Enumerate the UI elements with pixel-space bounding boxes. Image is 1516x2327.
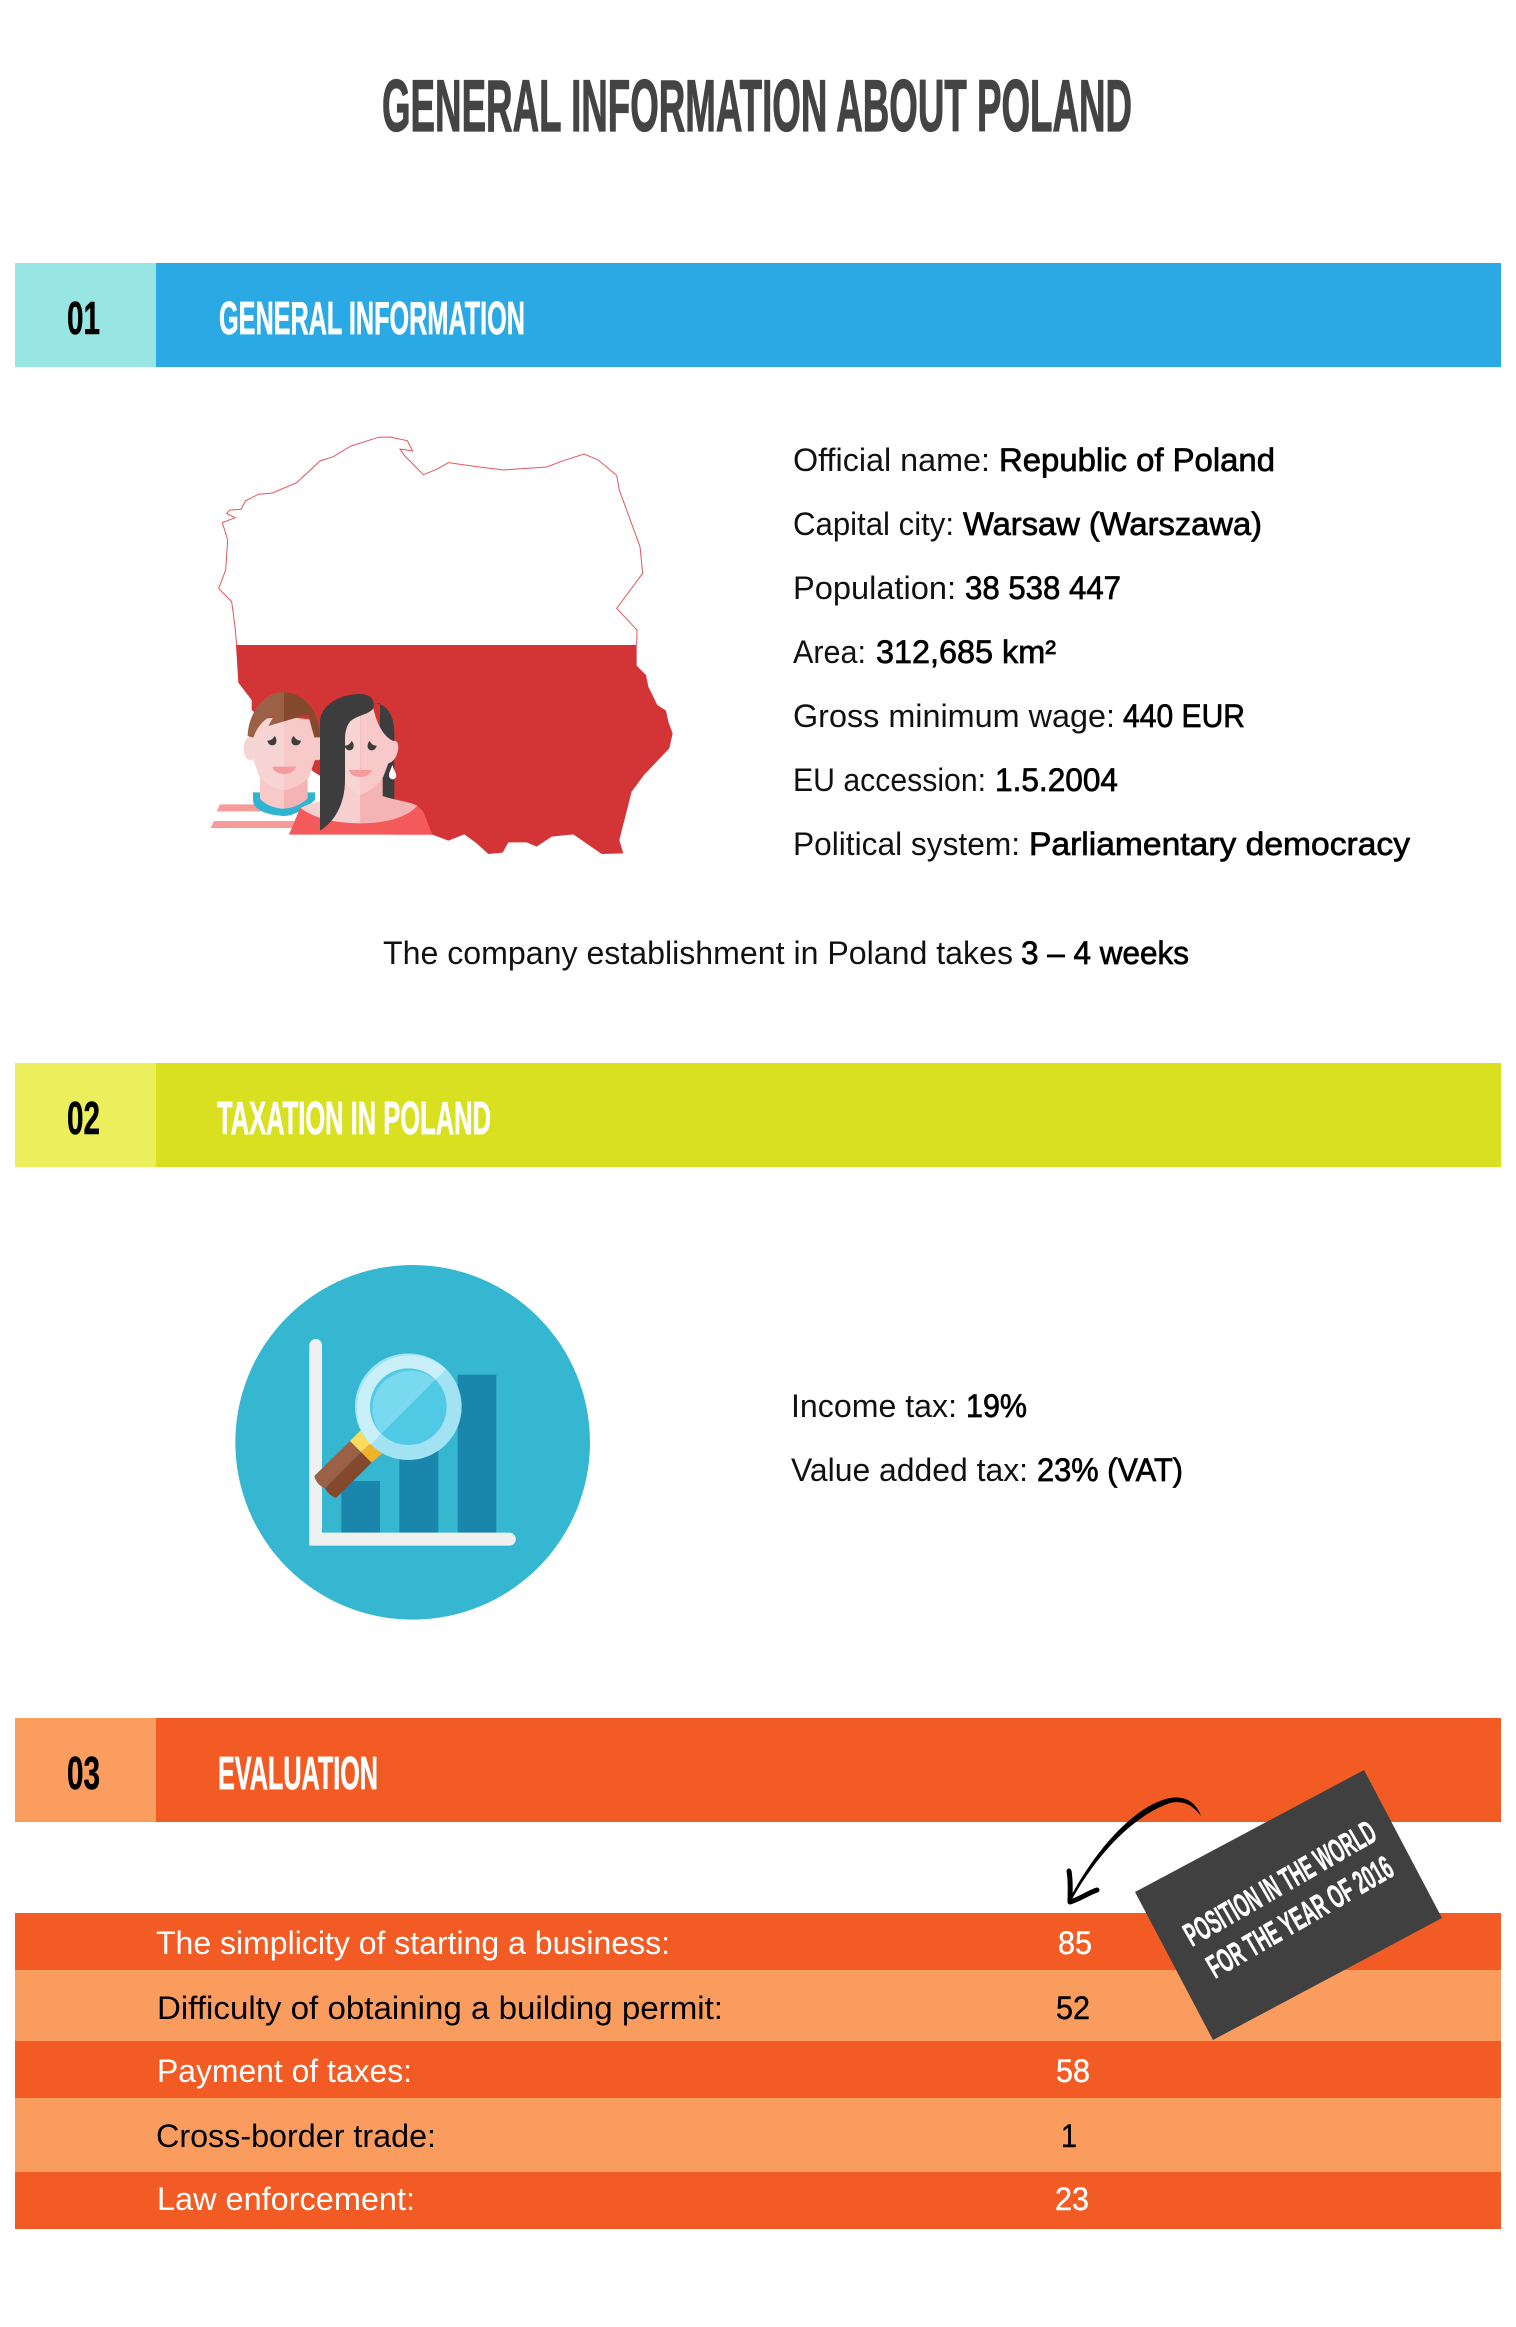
section header 02 [15,1063,1501,1167]
row: cross-border trade: 1 [1061,2118,1077,2154]
row: simplicity of starting a business: 85 [1058,1925,1092,1961]
section header 01 [15,263,1501,367]
callout: position in the world [1135,1770,1442,2040]
facts list: Gross minimum wage: [793,698,1115,734]
facts list: Republic of Poland [999,442,1275,478]
row: cross-border trade: Cross-border trade: [156,2118,436,2154]
icon: chart with magnifying glass [235,1265,590,1620]
facts list [793,442,1410,862]
facts list: Area: [793,634,866,670]
section header 01: 01 [67,292,100,344]
tax facts: Income tax: [791,1388,957,1424]
map: white upper half [219,437,643,645]
panel: general information [15,263,1501,971]
row: building permit [15,1970,1501,2041]
section header 02: 02 [67,1092,100,1144]
panel: evaluation [15,1718,1501,2229]
facts list: Political system: [793,826,1020,862]
facts list: Parliamentary democracy [1029,826,1410,862]
map: red lower half [236,645,673,854]
section header 03 [15,1718,1501,1822]
section header 02: TAXATION IN POLAND [217,1092,491,1144]
facts list: 312,685 km² [876,634,1056,670]
facts list: Population: [793,570,956,606]
section header 03: 03 [67,1747,100,1799]
company establishment note: The company establishment in Poland takes [383,935,1013,971]
facts list: Warsaw (Warszawa) [963,506,1262,542]
row: law enforcement [15,2172,1501,2229]
facts list: 1.5.2004 [995,762,1118,798]
row: payment of taxes [15,2041,1501,2098]
row: law enforcement: Law enforcement: [157,2181,415,2217]
tax facts [791,1388,1183,1488]
person: man [211,692,324,828]
facts list: Official name: [793,442,990,478]
facts list: EU accession: [793,762,986,798]
facts list: Capital city: [793,506,954,542]
panel: taxation [15,1063,1501,1620]
row: building permit: 52 [1056,1990,1090,2026]
illustration: Poland flag map with two people [211,437,673,854]
facts list: 440 EUR [1123,698,1245,734]
tax facts: Value added tax: [791,1452,1028,1488]
tax facts: 19% [966,1388,1027,1424]
facts list: 38 538 447 [965,570,1121,606]
section header 03: EVALUATION [218,1747,378,1799]
ranking table [15,1913,1501,2229]
row: simplicity of starting a business: The simplicity of starting a business: [156,1925,670,1961]
row: law enforcement: 23 [1055,2181,1089,2217]
company establishment note: 3 – 4 weeks [1021,935,1189,971]
tax facts: 23% (VAT) [1037,1452,1183,1488]
row: building permit: Difficulty of obtaining a building permit: [157,1990,723,2026]
arrow pointing to the rank column [1069,1798,1201,1902]
person: woman [289,694,432,835]
row: cross-border trade [15,2098,1501,2172]
row: payment of taxes: 58 [1056,2053,1090,2089]
row: simplicity of starting a business [15,1913,1501,1970]
row: payment of taxes: Payment of taxes: [157,2053,412,2089]
section header 01: GENERAL INFORMATION [219,292,525,344]
